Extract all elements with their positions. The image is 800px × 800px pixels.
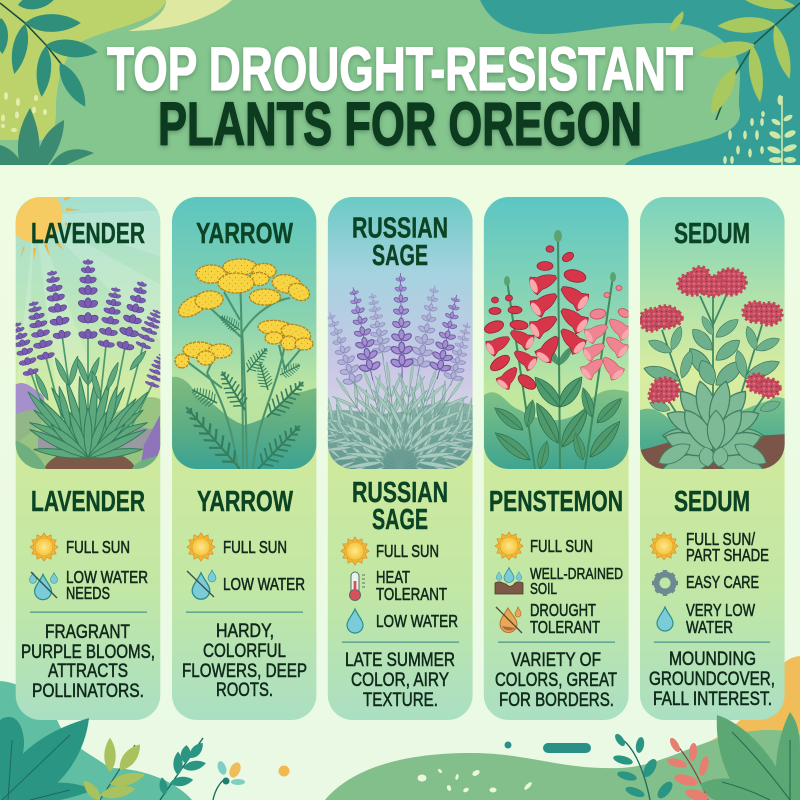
icon: left lower plant [0, 108, 94, 165]
label: full sun / part shade: FULL SUN/ [686, 529, 755, 549]
description: penstemon: VARIETY OF [511, 649, 601, 671]
penstemon leaves [491, 344, 626, 470]
label: sedum on image: SEDUM [674, 218, 750, 250]
description: yarrow: HARDY, [216, 620, 274, 642]
sedum base rosette [658, 380, 767, 469]
label: heat tolerant: TOLERANT [376, 584, 447, 604]
label: lavender on image: LAVENDER [31, 218, 145, 250]
label: low water needs: LOW WATER [66, 567, 148, 587]
name: russian sage: SAGE [372, 504, 428, 536]
icon: coral sprig [666, 736, 719, 800]
label: yarrow on image: YARROW [196, 218, 293, 250]
description: lavender: POLLINATORS. [32, 680, 144, 702]
illustration: penstemon [483, 197, 634, 470]
label: well-drained soil: WELL-DRAINED [530, 566, 623, 583]
label: well-drained soil [530, 566, 623, 598]
yarrow stems [188, 292, 301, 469]
panel: penstemon [483, 197, 634, 720]
penstemon red flowers [483, 246, 592, 392]
description: russian sage: TEXTURE. [363, 689, 438, 711]
label: russian sage on image: RUSSIAN [352, 212, 448, 244]
illustration: sedum [640, 197, 786, 481]
icon: full sun [187, 533, 215, 561]
title [107, 35, 693, 158]
penstemon stems [507, 236, 613, 469]
label: russian sage on image [352, 212, 448, 272]
foreground plants: bottom right [612, 712, 800, 800]
penstemon bud tips [504, 230, 616, 286]
label: easy care: EASY CARE [686, 572, 759, 592]
icon: left leaf branch [0, 0, 99, 111]
icon: drought tolerant [496, 607, 522, 633]
lavender flower spikes [16, 259, 160, 388]
icon: thermometer [350, 572, 365, 600]
name: penstemon: PENSTEMON [489, 486, 623, 518]
name: yarrow: YARROW [197, 486, 293, 518]
name: russian sage: RUSSIAN [352, 477, 448, 509]
icon: water drop [347, 609, 363, 633]
icon: well-drained soil [495, 568, 523, 594]
description: lavender: PURPLE BLOOMS, [21, 641, 155, 663]
icon: right leaf branch [697, 0, 800, 120]
label: very low water: VERY LOW [686, 600, 755, 620]
icon: lime sprig [80, 738, 146, 800]
panel: russian sage [328, 197, 473, 720]
description: yarrow: FLOWERS, DEEP [182, 660, 307, 682]
panel: lavender [16, 197, 160, 720]
label: full sun / part shade: PART SHADE [686, 545, 769, 565]
label: well-drained soil: SOIL [530, 581, 557, 598]
lavender stems [31, 335, 152, 455]
icon: full sun [650, 532, 678, 560]
description: sedum [649, 648, 775, 710]
description: sedum: MOUNDING [669, 648, 756, 670]
description: penstemon [495, 649, 617, 711]
illustration: lavender [16, 197, 160, 469]
label: heat tolerant [376, 567, 447, 604]
front spikes [350, 273, 460, 380]
panel: yarrow [172, 197, 318, 720]
lavender foliage [25, 349, 151, 462]
yarrow flower heads [175, 259, 313, 368]
silver foliage [328, 352, 473, 469]
label: full sun: FULL SUN [530, 536, 593, 556]
description: lavender: ATTRACTS [48, 660, 128, 682]
yarrow foliage [186, 315, 304, 469]
label: russian sage on image: SAGE [372, 240, 428, 272]
icon: small flower [213, 760, 245, 800]
label: low water: LOW WATER [376, 611, 458, 631]
back spikes [328, 286, 470, 386]
icon: teal sprig [158, 738, 207, 800]
illustration: russian sage [328, 197, 473, 469]
description: yarrow: ROOTS. [216, 679, 273, 701]
label: low water needs [66, 567, 148, 603]
description: sedum: FALL INTEREST. [653, 688, 772, 710]
label: low water needs: NEEDS [66, 583, 110, 603]
description: lavender [21, 621, 155, 702]
icon: gear [652, 570, 678, 596]
icon: low water [187, 570, 216, 599]
penstemon pink flowers [580, 285, 629, 380]
icon: full sun [341, 537, 369, 565]
icon: low water [29, 572, 58, 600]
label: low water: LOW WATER [223, 574, 305, 594]
sedum flower heads [640, 267, 782, 402]
label: full sun: FULL SUN [376, 541, 439, 561]
name: russian sage [352, 477, 448, 536]
sedum stems [661, 296, 765, 412]
icon: full sun [495, 532, 523, 560]
icon: large green leaves [700, 712, 800, 800]
label: full sun / part shade [686, 529, 769, 565]
label: drought tolerant: TOLERANT [530, 617, 600, 637]
label: drought tolerant: DROUGHT [530, 600, 596, 620]
description: russian sage: LATE SUMMER [345, 649, 455, 671]
label: very low water [686, 600, 755, 637]
panel: sedum [640, 197, 786, 720]
illustration: yarrow [172, 197, 318, 476]
description: penstemon: COLORS, GREAT [495, 669, 617, 691]
header banner [0, 0, 800, 165]
name: lavender: LAVENDER [31, 486, 145, 518]
description: lavender: FRAGRANT [45, 621, 130, 643]
icon: teal sprig [612, 732, 675, 800]
decorative dots left [1, 92, 47, 132]
description: yarrow [182, 620, 307, 701]
description: russian sage [345, 649, 455, 711]
description: penstemon: FOR BORDERS. [499, 689, 614, 711]
description: russian sage: COLOR, AIRY [351, 669, 449, 691]
foreground plants: bottom left [0, 717, 245, 800]
icon: full sun [30, 533, 58, 561]
label: drought tolerant [530, 600, 600, 637]
sedum upper leaves [642, 314, 782, 414]
label: very low water: WATER [686, 617, 733, 637]
name: sedum: SEDUM [674, 486, 750, 518]
label: full sun: FULL SUN [66, 537, 130, 557]
label: full sun: FULL SUN [223, 537, 287, 557]
bottom background decoration [0, 656, 800, 800]
icon: right fern sprig [723, 95, 798, 165]
icon: water drop [657, 607, 673, 631]
description: yarrow: COLORFUL [203, 640, 286, 662]
label: heat tolerant: HEAT [376, 567, 410, 587]
